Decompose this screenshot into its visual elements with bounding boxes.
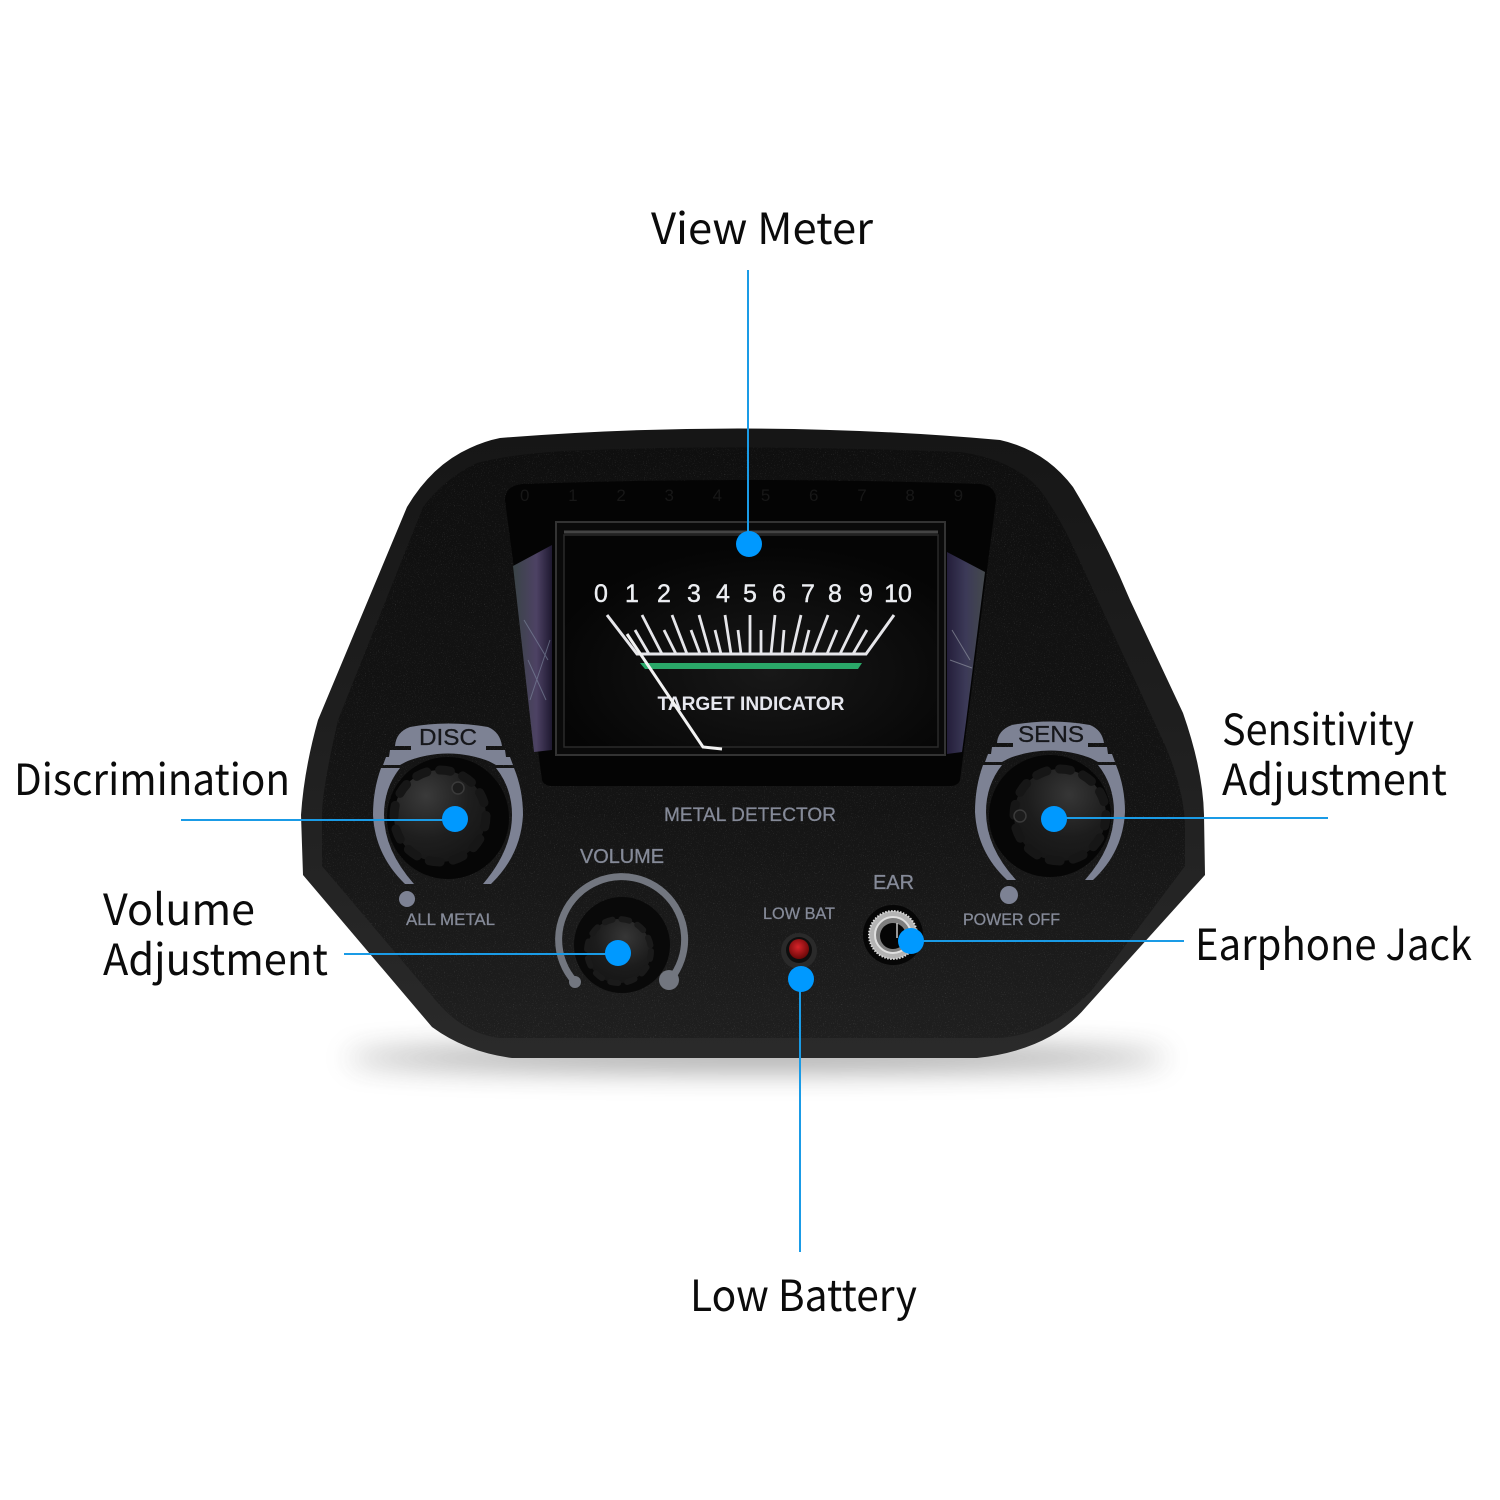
callout: discrimination [14, 746, 468, 832]
needle [627, 634, 722, 749]
scale numbers: 4 [716, 580, 730, 608]
low battery indicator [763, 904, 835, 969]
sens knob [989, 755, 1111, 877]
ground shadow [347, 1046, 1167, 1070]
mirrored scale reflection: 0 1 2 3 4 5 6 7 8 9 [520, 486, 980, 505]
earphone jack [863, 872, 923, 965]
scale numbers [594, 580, 912, 608]
scale numbers: 1 [625, 580, 639, 608]
view meter dial [556, 522, 945, 755]
disc knob [387, 757, 509, 879]
meter recess [505, 480, 996, 786]
callout: sensitivity adjustment: Sensitivity [1222, 696, 1414, 758]
power off label: POWER OFF [963, 910, 1060, 929]
sens arc [975, 765, 1125, 880]
textured face plate [322, 447, 1185, 1038]
all metal marker [399, 891, 415, 907]
scale numbers: 0 [594, 580, 608, 608]
low bat label: LOW BAT [763, 904, 835, 923]
all metal label: ALL METAL [406, 910, 495, 929]
callout: view meter: View Meter [651, 195, 873, 257]
disc control [373, 724, 523, 929]
rubber outer shell [301, 428, 1205, 1058]
callout: low battery [690, 966, 917, 1324]
disc badge [389, 724, 506, 762]
meter bezel [556, 522, 945, 755]
callout: earphone jack [898, 911, 1472, 973]
callout: volume adjustment: Volume [103, 876, 255, 938]
scale numbers: 9 [859, 580, 873, 608]
red led [789, 939, 809, 959]
ear label: EAR [873, 872, 914, 894]
green zone bar [640, 663, 862, 669]
callout: sensitivity adjustment [1041, 696, 1447, 832]
scale numbers: 10 [884, 580, 912, 608]
callout: earphone jack: Earphone Jack [1195, 911, 1472, 973]
sens control: SENS [1018, 721, 1084, 747]
sens badge [991, 722, 1108, 759]
metal detector control box [300, 428, 1210, 1060]
scale numbers: 7 [801, 580, 815, 608]
metal detector label: METAL DETECTOR [664, 805, 836, 826]
volume arc [559, 877, 685, 982]
scale numbers: 3 [687, 580, 701, 608]
callout: view meter [651, 195, 873, 557]
target indicator text: TARGET INDICATOR [658, 694, 845, 715]
scale numbers: 2 [657, 580, 671, 608]
volume knob [574, 897, 670, 993]
scale numbers: 5 [743, 580, 757, 608]
callout: volume adjustment [103, 876, 631, 988]
meter face [564, 535, 938, 747]
left reflection panel [513, 545, 552, 752]
power off marker [1000, 886, 1018, 904]
volume label: VOLUME [580, 846, 664, 868]
scale numbers: 8 [828, 580, 842, 608]
disc arc [373, 768, 523, 884]
volume control [559, 846, 685, 993]
right reflection panel [947, 552, 985, 754]
scale numbers: 6 [772, 580, 786, 608]
scale ticks [607, 615, 894, 654]
callout: discrimination: Discrimination [14, 746, 290, 808]
callout: volume adjustment: Adjustment [103, 926, 328, 988]
jack ring [869, 911, 917, 959]
disc control: DISC [419, 724, 477, 750]
callout: sensitivity adjustment: Adjustment [1222, 746, 1447, 808]
callout: low battery: Low Battery [690, 1262, 917, 1324]
sens control [963, 721, 1125, 929]
